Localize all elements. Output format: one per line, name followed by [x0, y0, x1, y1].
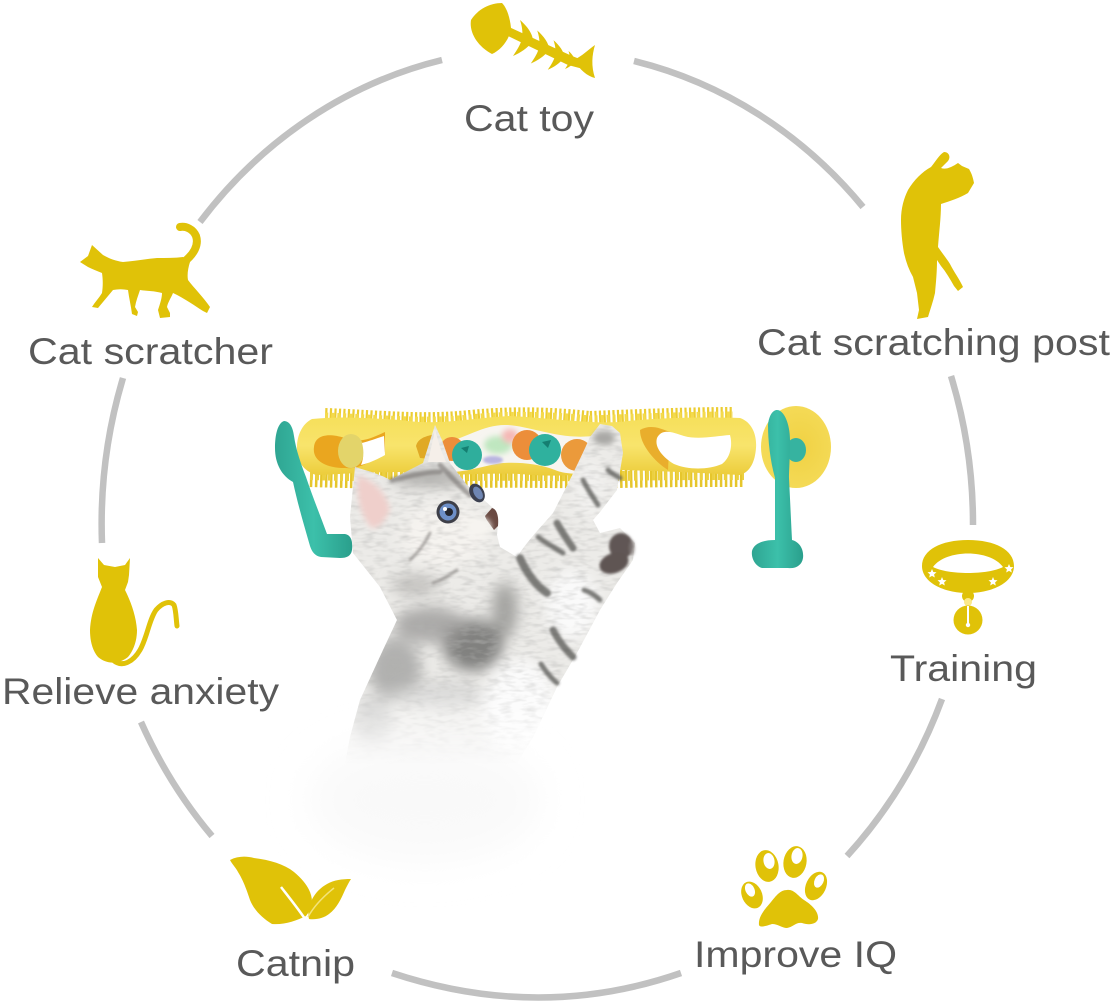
- orange and teal bell balls: [440, 437, 464, 461]
- lower paw pads: [596, 533, 635, 578]
- track body: [297, 416, 756, 476]
- label: cat scratcher: Cat scratcher: [28, 331, 273, 372]
- left teal arm: [275, 421, 352, 558]
- soft shadow under kitten: [310, 740, 540, 860]
- ring: grey circular arcs: [102, 60, 973, 998]
- fur tone patches: [354, 462, 598, 740]
- centre window: [440, 425, 592, 474]
- suction cup: [761, 406, 831, 488]
- right teal connector: [786, 438, 806, 462]
- left window: [314, 432, 385, 468]
- label: catnip: Catnip: [236, 943, 355, 984]
- icon: fish bone: [471, 3, 595, 78]
- second left opening: [416, 434, 440, 460]
- raised paw top patches: [593, 431, 615, 445]
- label: cat toy: Cat toy: [464, 98, 595, 139]
- icon: catnip leaves: [230, 857, 351, 924]
- arm stripes: [520, 470, 620, 683]
- top comb spikes: [325, 416, 733, 422]
- eye far: [466, 481, 488, 505]
- nose: [485, 508, 498, 530]
- label: improve IQ: Improve IQ: [694, 934, 897, 975]
- label: training: Training: [890, 648, 1037, 689]
- label: relieve anxiety: Relieve anxiety: [2, 671, 280, 712]
- icon: paw print: [737, 844, 831, 928]
- right teal arm: [752, 410, 803, 568]
- bottom comb spikes: [310, 475, 744, 480]
- icon: sitting cat: [90, 558, 177, 664]
- icon: walking cat: [80, 227, 210, 318]
- muzzle: [465, 517, 491, 537]
- photo: grey tabby kitten reaching up: [349, 424, 636, 749]
- icon: collar with bell: [922, 540, 1014, 634]
- right window: [640, 427, 670, 470]
- feathers: [484, 436, 512, 454]
- eye near: [436, 500, 460, 524]
- icon: leaping cat: [901, 152, 974, 319]
- label: cat scratching post: Cat scratching post: [757, 322, 1111, 363]
- toy: wall mounted track with suction cup: [275, 406, 831, 568]
- forehead and head stripes: [392, 465, 470, 583]
- left ear pink: [357, 475, 390, 528]
- right ear pink: [428, 430, 446, 462]
